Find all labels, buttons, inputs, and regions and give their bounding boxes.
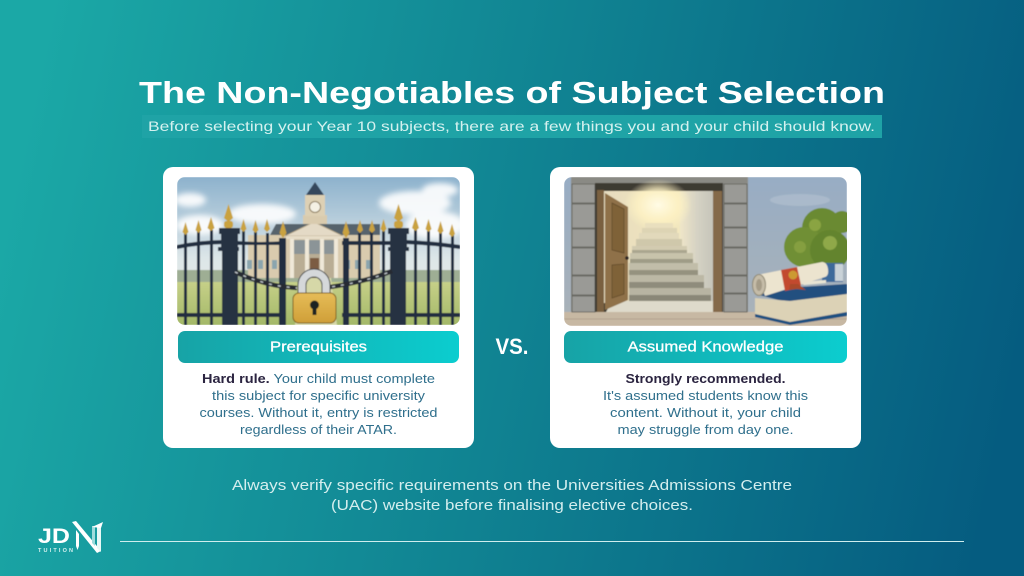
diploma scroll <box>752 262 828 296</box>
prerequisites text <box>200 371 438 437</box>
gold finials <box>182 204 455 238</box>
prerequisites text: regardless of their ATAR. <box>240 422 397 437</box>
fence bars <box>177 230 460 325</box>
footer note: Always verify specific requirements on the Universities Admissions Centre <box>232 478 792 494</box>
footer note <box>232 478 792 514</box>
illustration: locked university gate <box>174 177 465 325</box>
assumed knowledge label <box>564 331 847 363</box>
assumed knowledge text: It's assumed students know this <box>603 388 809 403</box>
subtitle: Before selecting your Year 10 subjects, there are a few things you and your child should know. <box>148 118 875 134</box>
door <box>605 193 629 310</box>
stone frame <box>571 177 748 312</box>
subtitle <box>142 115 882 138</box>
assumed knowledge text <box>603 371 809 437</box>
footer divider <box>120 541 964 542</box>
assumed knowledge text: content. Without it, your child <box>610 405 801 420</box>
assumed knowledge label: Assumed Knowledge <box>628 338 784 356</box>
fence posts <box>218 228 409 325</box>
logo: JDN Tuition: JD <box>38 525 70 548</box>
tree <box>784 208 847 267</box>
books <box>755 263 847 325</box>
title: The Non-Negotiables of Subject Selection <box>139 75 885 110</box>
illustration: open door and stairs <box>564 177 853 326</box>
building <box>247 182 380 325</box>
assumed knowledge text: Strongly recommended. <box>626 371 786 386</box>
prerequisites text: this subject for specific university <box>212 388 426 403</box>
chain <box>235 271 392 288</box>
assumed knowledge text: may struggle from day one. <box>618 422 794 437</box>
prerequisites label <box>178 331 459 363</box>
logo: JDN Tuition: TUITION <box>38 548 73 554</box>
padlock <box>293 273 336 323</box>
panel: assumed knowledge <box>550 167 861 448</box>
footer note: (UAC) website before finalising elective choices. <box>331 498 693 514</box>
doorway interior <box>603 190 681 304</box>
prerequisites text: courses. Without it, entry is restricted <box>200 405 438 420</box>
prerequisites label: Prerequisites <box>270 338 367 356</box>
stairs <box>629 223 711 301</box>
vs label: VS. <box>496 334 528 359</box>
panel: prerequisites <box>163 167 474 448</box>
logo: JDN Tuition <box>38 521 103 554</box>
prerequisites text: Hard rule. Your child must complete <box>202 371 435 386</box>
